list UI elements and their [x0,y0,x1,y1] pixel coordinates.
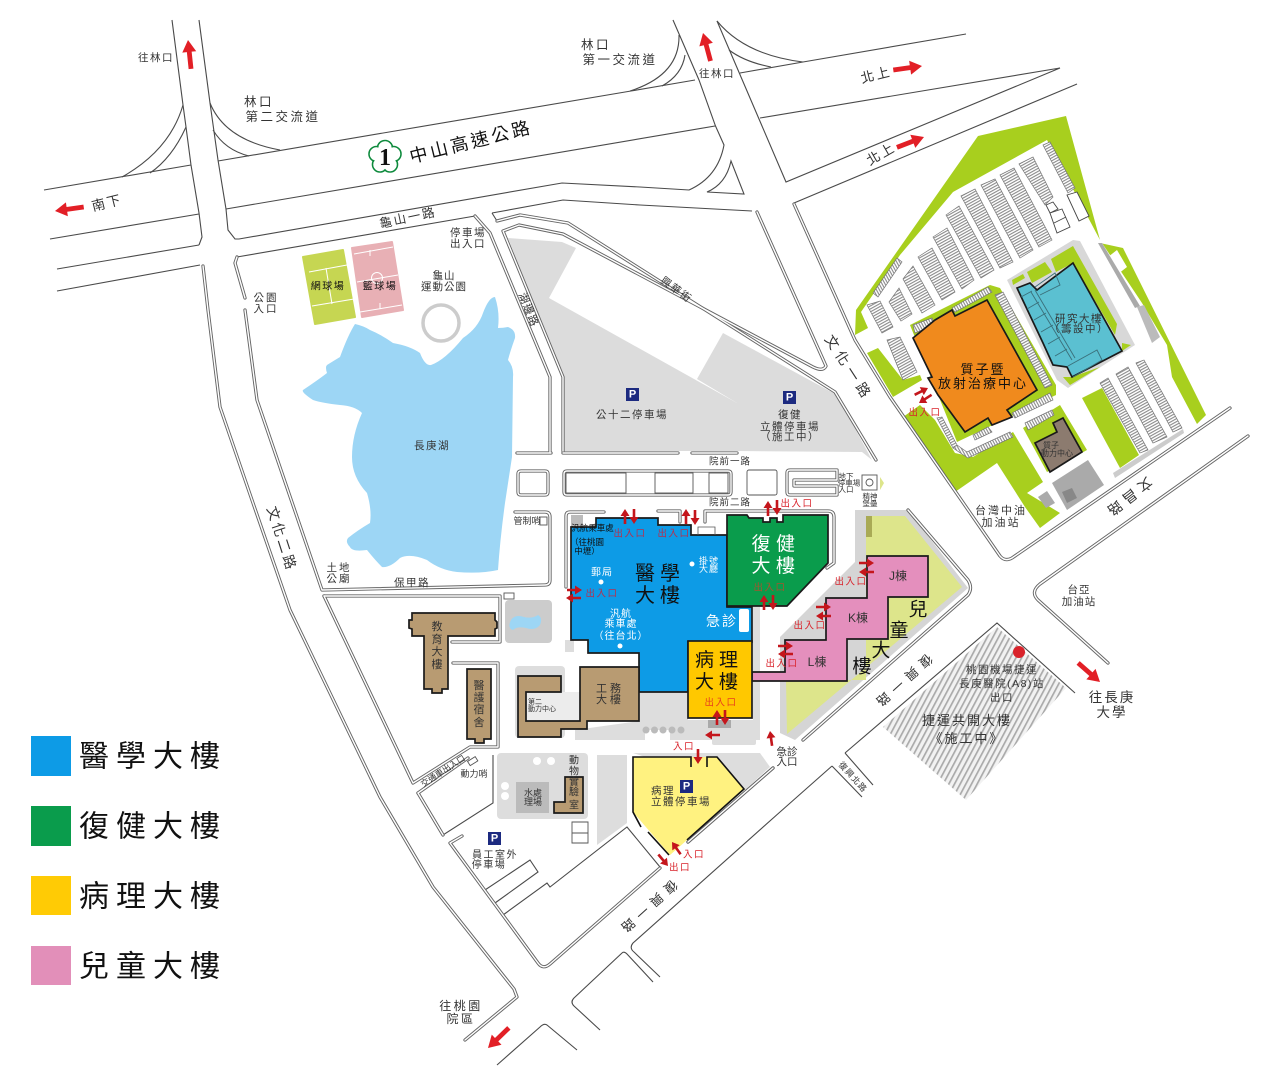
label: shuttle to Taipei: 乘車處 [604,616,638,630]
basketball court [352,242,403,317]
label: shuttle to Taipei: （往台北） [594,628,648,642]
road and place labels: 第一交流道 [582,52,658,67]
P icon: staff: P [491,832,498,844]
road and place labels: 文昌路 [1101,474,1155,522]
road and place labels: 復興一路 [614,877,680,939]
road and place labels: 復興北路 [837,760,869,794]
legend: medical [31,736,227,776]
sports ring [423,305,459,341]
spirit fortress green marker [880,477,884,490]
road and place labels: 《施工中》 [929,730,1005,746]
equipment blocks near gas station [1038,460,1104,510]
road and place labels: 往桃園 [439,998,483,1013]
entrance labels: 入口 [683,850,705,860]
green areas: proton centre campus [855,116,1206,528]
P icon: staff [488,832,501,845]
entrance labels: 出入口 [793,620,827,632]
entrance labels: 出入口 [704,696,738,708]
label: pathology parking: 立體停車場 [651,795,711,808]
label: second power centre: 動力中心 [528,704,556,712]
roads: single lines [44,20,1077,1065]
label: education [432,620,442,671]
road and place labels: 院區 [446,1012,476,1026]
freeway badge [369,140,401,172]
label: pathology: 大樓 [695,670,743,692]
entrance labels: 出入口 [765,658,799,670]
label: education: 樓 [432,657,442,671]
label: dormitory [474,679,484,729]
entrance labels: 出入口 [585,588,619,600]
label: research: 研究大樓 [1055,312,1103,325]
road and place labels: 北上 [864,140,898,168]
label: children's building: 大 [871,640,891,662]
road and place labels: 北上 [859,64,893,86]
road and place labels: 停車場 [838,477,861,487]
big arrows [54,31,1105,1053]
building: proton centre [913,300,1037,432]
label: rehabilitation: 大樓 [751,554,801,576]
road and place labels: 林口 [244,95,274,109]
label: proton centre: 質子暨 [960,362,1006,376]
roads: double lines (outer) [203,204,1248,1040]
road and place labels: 加油站 [982,515,1020,529]
road and place labels: 龜山 [432,269,456,282]
building: proton power centre [1035,418,1082,472]
emergency marker [739,609,749,632]
building: children's (pink) [752,556,928,681]
label: children's building [852,598,928,678]
road and place labels: 籃球場 [363,280,397,292]
label: engineering: 大樓 [596,692,624,706]
building: research [1017,263,1122,377]
road and place labels: 長庚醫院(A8)站 [959,677,1045,690]
road and place labels: 文化二路 [264,504,300,574]
building: animal lab [554,754,583,813]
label: emergency: 急診 [706,613,738,629]
MRT joint development hatch [883,627,1066,800]
building: rehabilitation (green) [727,515,828,606]
label: shuttle to Taipei: 汎航 [610,606,632,620]
P icon: pathology: P [683,780,690,792]
road and place labels: 出口 [990,691,1014,704]
road and place labels: 捷運共開大樓 [922,712,1012,728]
road and place labels: 管制哨 [513,515,541,526]
service grey zones [497,600,770,845]
road and place labels: 院前一路 [709,456,751,468]
road and place labels: 公園 [254,292,278,304]
label: education: 教 [432,620,442,633]
road and place labels: 第二交流道 [245,109,321,124]
road and place labels: 復興一路 [869,651,935,713]
tennis court [303,250,355,324]
road and place labels: 台灣中油 [975,503,1027,517]
road and place labels: 院前二路 [709,496,751,508]
label: second power centre: 第二 [528,696,542,706]
lake [303,297,515,573]
label: post office: 郵局 [591,566,613,578]
label: rehabilitation: 復健 [751,532,801,554]
road and place labels: 運動公園 [421,280,467,293]
road and place labels: 堡壘 [862,498,878,508]
label: wing J: J棟 [889,568,907,583]
label: proton centre: 放射治療中心 [938,376,1028,390]
P icon: pathology [680,780,693,793]
road and place labels: 停車場 [450,226,486,239]
label: animal lab: 動 [569,754,579,766]
children's building lawn [780,510,968,740]
label: registration: 掛號 [699,555,719,566]
road and place labels: 入口 [838,484,854,494]
road and place labels: 南下 [90,192,124,214]
entrance labels: 出入口 [657,528,691,540]
road and place labels: 往林口 [699,67,735,80]
label: pathology parking: 病理 [651,784,675,797]
label: pathology: 病理 [695,648,743,670]
road and place labels: 往林口 [138,51,174,64]
legend: children's: 兒童大樓 [79,950,227,984]
label: wing K: K棟 [848,610,868,625]
road and place labels: 長庚湖 [414,439,450,452]
label: proton power centre: 動力中心 [1041,448,1073,458]
building: pathology (yellow) [688,641,752,718]
pathology parking [633,757,744,855]
entrance labels: 出入口 [613,528,647,540]
label: animal lab: 驗 [569,786,579,798]
road and place labels: 立體停車場 [760,420,820,433]
roads: double lines (inner) [203,204,1248,1040]
label: animal lab: 室 [569,798,579,812]
P icon: rehabilitation [783,391,796,404]
road and place labels: 中山高速公路 [407,117,535,167]
dots on medical building [598,562,694,648]
research building site frame [1007,240,1135,388]
legend: medical: 醫學大樓 [79,740,227,774]
road and place labels: 林口 [581,38,611,52]
label: animal lab: 實 [569,776,579,788]
label: registration: 大廳 [699,563,719,574]
road and place labels: 公廟 [326,572,352,585]
road and place labels: 保甲路 [394,576,430,589]
legend: children's [31,946,227,985]
road and place labels: 入口 [776,756,798,768]
entrance labels: 出口 [669,862,691,874]
label: medical building: 醫學 [635,562,685,585]
road and place labels: 復健 [778,408,802,421]
road and place labels: 停車場 [472,858,506,870]
road and place labels: 交通車出入口 [419,753,467,789]
label: children's building: 童 [889,620,909,642]
legend: pathology: 病理大樓 [79,880,227,914]
entrance labels: 出入口 [753,582,787,594]
road and place labels: 台亞 [1068,583,1090,596]
road and place labels: 湖邊路 [516,290,542,329]
label: Fanhang shuttle: 中壢） [574,546,600,556]
P icon: public 12: P [629,388,636,400]
label: research: （籌設中） [1049,322,1109,335]
label: education: 大 [432,644,442,658]
road and place labels: 急診 [776,745,798,758]
label: children's building: 兒 [908,598,928,620]
road and place labels: 公十二停車場 [596,408,668,421]
road and place labels: 精神 [862,490,878,500]
road and place labels: 入口 [254,303,278,315]
road and place labels: 出入口 [450,237,486,250]
legend: pathology [31,876,227,915]
road and place labels: 文化一路 [822,332,876,404]
entrance labels: 出入口 [834,576,868,588]
P icon: rehabilitation: P [786,392,793,404]
label: children's building: 樓 [852,656,872,678]
road and place labels: 網球場 [311,280,345,292]
road and place labels: 員工室外 [472,848,518,860]
road and place labels [90,38,1155,1026]
entrance labels: 入口 [673,742,695,752]
freeway badge: 1 [379,145,391,171]
road and place labels: 動力哨 [460,768,488,779]
label: medical building: 大樓 [635,584,685,607]
entrance labels: 出入口 [780,498,814,510]
label: dormitory: 宿 [474,702,484,716]
building: medical (blue) [570,515,752,692]
legend: rehabilitation: 復健大樓 [79,810,227,844]
road and place labels: 桃園機場捷運 [966,663,1038,676]
P icon: public 12 [626,388,639,401]
label: Fanhang shuttle: （往桃園 [570,537,604,547]
road overlay at pathology parking [688,768,773,842]
parking lot area: rehabilitation [697,333,872,460]
label: wing L: L棟 [808,654,826,669]
label: engineering: 工務 [596,681,624,695]
label: education: 育 [432,632,442,646]
building: engineering and second power centre [518,667,639,737]
road and place labels: 往長庚 [1089,690,1135,704]
road and place labels: 地下 [838,470,854,480]
road and place labels: 加油站 [1062,595,1096,608]
label: Fanhang shuttle: 汎航乘車處 [571,523,614,533]
parking lot area: public 12 [508,238,737,451]
label: dormitory: 護 [474,690,484,704]
entrance labels [585,406,942,874]
road and place labels: （施工中） [760,430,820,443]
road and place labels: 土地 [326,561,352,574]
legend: rehabilitation [31,806,227,846]
entrance labels: 出入口 [908,406,942,418]
road and place labels: 龜山一路 [378,204,438,231]
parking rows: proton campus [867,142,1182,458]
red dot: MRT station [1013,646,1025,658]
building: staff dormitory [467,669,491,743]
label: dormitory: 醫 [474,679,484,692]
building: education [409,613,497,693]
label: proton power centre: 質子 [1043,440,1059,450]
road and place labels: 興華街 [658,274,695,305]
block interiors and spirit fortress [468,470,877,766]
label: dormitory: 舍 [474,715,484,729]
label: animal lab [569,754,579,812]
road and place labels: 理場 [524,796,542,807]
label: animal lab: 物 [569,764,579,778]
road and place labels: 水處 [524,787,542,798]
road and place labels: 大學 [1096,704,1128,720]
small entrance arrows [566,384,934,869]
